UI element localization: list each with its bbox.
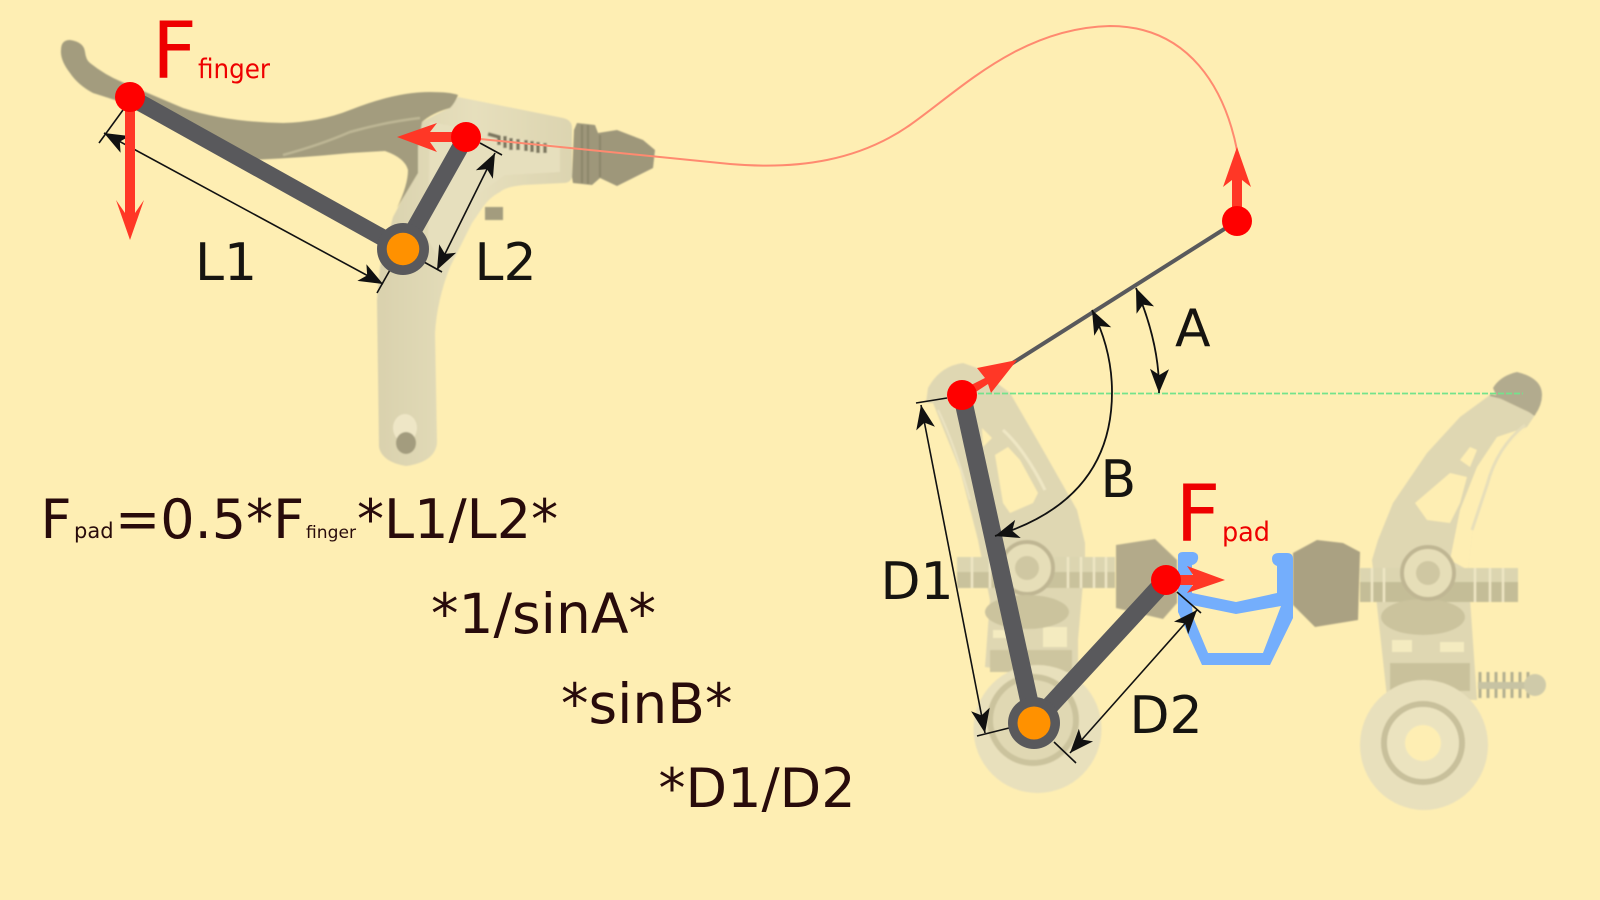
label L1: L1 (195, 233, 257, 293)
label B: B (1100, 450, 1136, 510)
label L2: L2 (474, 233, 537, 293)
cable link line (962, 221, 1237, 395)
formula: *D1/D2 (658, 757, 856, 820)
label F finger: F (152, 7, 197, 97)
left brake arm photo (926, 363, 1177, 793)
formula: *1/sinA* (431, 582, 656, 646)
red point: cable top (1222, 206, 1252, 236)
lever pivot (377, 223, 429, 275)
arrow: finger force down (116, 97, 144, 240)
formula: *sinB* (561, 672, 733, 736)
arrow: cable pull left (397, 123, 466, 152)
blue wheel rim cross-section (1178, 552, 1293, 665)
right brake arm photo (1293, 372, 1546, 810)
lever arm L2 (403, 137, 466, 249)
label F pad (1176, 470, 1270, 560)
caliper arm D2 (1034, 580, 1166, 723)
dimension D2 (1054, 592, 1201, 763)
red point: finger (115, 82, 145, 112)
brake lever photo (61, 40, 655, 466)
label D2: D2 (1130, 686, 1203, 746)
formula: pad (74, 519, 114, 543)
label F finger (152, 7, 271, 97)
cable (480, 26, 1237, 166)
arrow: pad force (1166, 566, 1225, 593)
red point: pad (1151, 565, 1181, 595)
label A: A (1175, 299, 1211, 359)
dimension L1 (99, 110, 390, 293)
lever arm L1 (130, 97, 403, 249)
formula: =0.5*F (115, 488, 304, 551)
caliper arm D1 (962, 395, 1034, 723)
arrow: cable pull up (1223, 147, 1251, 221)
red point: lever cable (451, 122, 481, 152)
angle arc B (995, 310, 1112, 536)
caliper pivot (1008, 697, 1060, 749)
formula: finger (306, 523, 356, 543)
dimension D1 (916, 398, 1009, 736)
formula (40, 488, 856, 820)
formula: *L1/L2* (357, 488, 558, 551)
red point: caliper top (947, 380, 977, 410)
dimension L2 (424, 143, 502, 272)
label F finger: finger (198, 54, 271, 85)
green dashed reference line (962, 392, 1523, 394)
formula: F (40, 488, 72, 551)
arrow: cable force on caliper (959, 360, 1017, 399)
label F pad: pad (1222, 517, 1270, 548)
label D1: D1 (880, 552, 954, 612)
label F pad: F (1176, 470, 1220, 560)
angle arc A (1136, 288, 1159, 393)
